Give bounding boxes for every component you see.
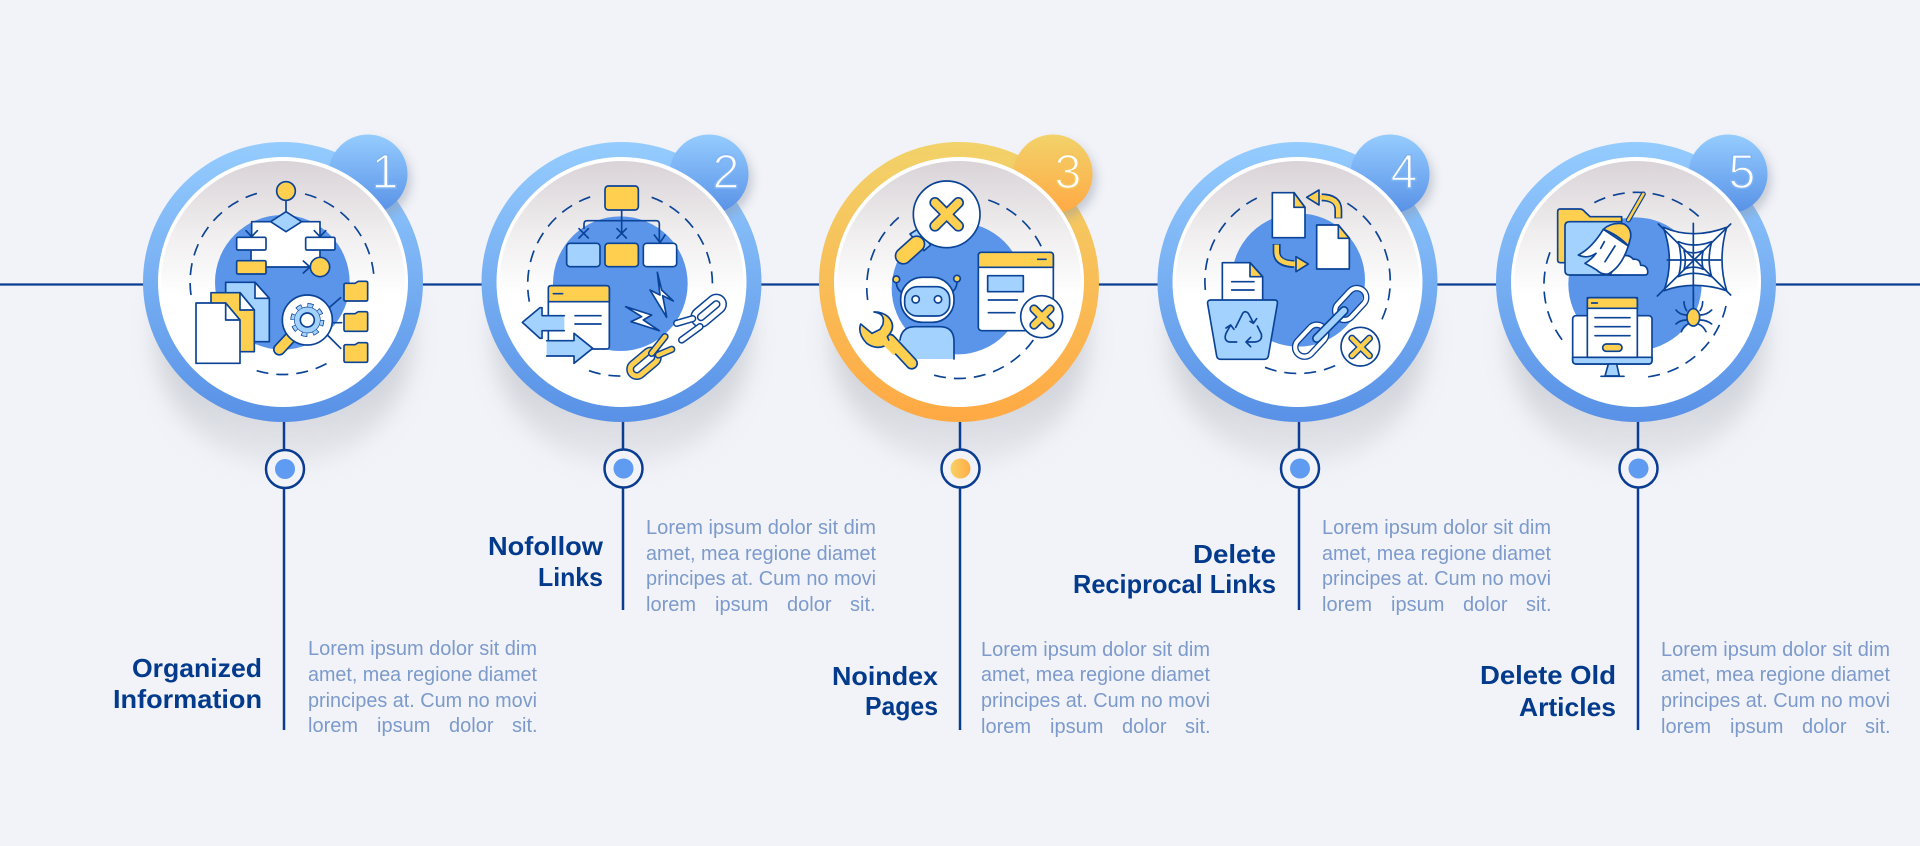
body text: amet, mea regione diamet — [1322, 543, 1551, 565]
body text: amet, mea regione diamet — [308, 664, 537, 686]
shadow — [1170, 210, 1426, 466]
number: 3 — [1055, 146, 1081, 199]
shadow — [832, 210, 1088, 466]
ring — [482, 142, 762, 422]
body text: amet, mea regione diamet — [646, 543, 876, 565]
heading — [1480, 660, 1616, 722]
connector and node — [604, 420, 642, 610]
panel: step 4 — [1073, 134, 1552, 616]
inner disc — [1172, 157, 1422, 407]
body text: dolor — [449, 715, 494, 737]
inner disc — [834, 157, 1084, 407]
body text: dolor — [1802, 716, 1847, 738]
connector and node — [942, 420, 980, 730]
body text: principes at. Cum no movi — [308, 690, 537, 712]
inner disc — [1511, 157, 1761, 407]
number: 4 — [1391, 146, 1417, 199]
heading — [1073, 539, 1276, 599]
body text: ipsum — [1730, 716, 1783, 738]
icon: robot, wrench, magnifier and blocked window — [860, 181, 1063, 378]
number badge — [670, 134, 752, 219]
body text: principes at. Cum no movi — [1322, 568, 1551, 590]
panel: step 3 — [819, 134, 1211, 738]
panel: step 5 — [1480, 134, 1891, 738]
body text: dolor — [1122, 716, 1167, 738]
body text: ipsum — [377, 715, 430, 737]
horizontal timeline — [0, 283, 1920, 286]
heading — [113, 653, 262, 714]
shadow — [156, 210, 412, 466]
icon: broom, folder, cobweb, spider and monitor — [1544, 192, 1731, 377]
ring — [819, 142, 1099, 422]
body text: sit. — [512, 715, 538, 737]
body text: amet, mea regione diamet — [1661, 664, 1890, 686]
connector and node — [1281, 420, 1319, 610]
heading: Reciprocal Links — [1073, 569, 1276, 599]
icon: hierarchy, window arrows and broken chain — [522, 186, 726, 379]
body text: dolor — [1463, 594, 1508, 616]
heading: Articles — [1519, 692, 1616, 722]
body text: ipsum — [1050, 716, 1103, 738]
shadow — [494, 210, 750, 466]
body text: Lorem ipsum dolor sit dim — [646, 517, 876, 539]
heading: Delete — [1193, 539, 1276, 569]
panel: step 2 — [482, 134, 876, 616]
body text: principes at. Cum no movi — [646, 568, 876, 590]
number: 5 — [1729, 146, 1755, 199]
connector and node — [1620, 420, 1658, 730]
connector and node — [266, 420, 304, 730]
body text: sit. — [850, 594, 876, 616]
heading: Noindex — [832, 661, 939, 691]
body text — [1322, 517, 1552, 616]
inner disc — [496, 157, 746, 407]
body text: Lorem ipsum dolor sit dim — [1661, 639, 1890, 661]
body text — [1661, 639, 1891, 738]
heading: Links — [538, 562, 603, 592]
number badge — [1014, 134, 1096, 219]
panel: step 1 — [113, 134, 538, 737]
body text: principes at. Cum no movi — [1661, 690, 1890, 712]
heading: Delete Old — [1480, 660, 1616, 690]
number badge — [1688, 134, 1771, 219]
body text: sit. — [1526, 594, 1552, 616]
shadow — [1509, 210, 1765, 466]
heading — [832, 661, 939, 721]
ring — [143, 142, 423, 422]
icon: swapped pages, recycling bin and removed link — [1205, 190, 1390, 373]
body text: Lorem ipsum dolor sit dim — [1322, 517, 1551, 539]
number badge — [1350, 134, 1433, 219]
body text: amet, mea regione diamet — [981, 664, 1210, 686]
body text — [981, 639, 1211, 738]
inner disc — [158, 157, 408, 407]
body text: lorem — [646, 594, 696, 616]
body text: principes at. Cum no movi — [981, 690, 1210, 712]
body text: dolor — [787, 594, 832, 616]
body text: ipsum — [715, 594, 768, 616]
heading: Pages — [865, 691, 938, 721]
body text: lorem — [1661, 716, 1711, 738]
heading: Organized — [132, 653, 262, 683]
body text: lorem — [1322, 594, 1372, 616]
ring — [1496, 142, 1776, 422]
body text: sit. — [1865, 716, 1891, 738]
number: 2 — [713, 146, 739, 199]
body text: ipsum — [1391, 594, 1444, 616]
body text: lorem — [981, 716, 1031, 738]
ring — [1158, 142, 1438, 422]
body text: Lorem ipsum dolor sit dim — [981, 639, 1210, 661]
number: 1 — [372, 146, 398, 199]
heading — [488, 531, 604, 592]
body text — [646, 517, 876, 616]
heading: Information — [113, 684, 262, 714]
body text — [308, 638, 538, 737]
icon: flowchart, documents and folder search — [190, 182, 374, 375]
body text: Lorem ipsum dolor sit dim — [308, 638, 537, 660]
body text: lorem — [308, 715, 358, 737]
body text: sit. — [1185, 716, 1211, 738]
number badge — [328, 134, 411, 219]
heading: Nofollow — [488, 531, 604, 561]
